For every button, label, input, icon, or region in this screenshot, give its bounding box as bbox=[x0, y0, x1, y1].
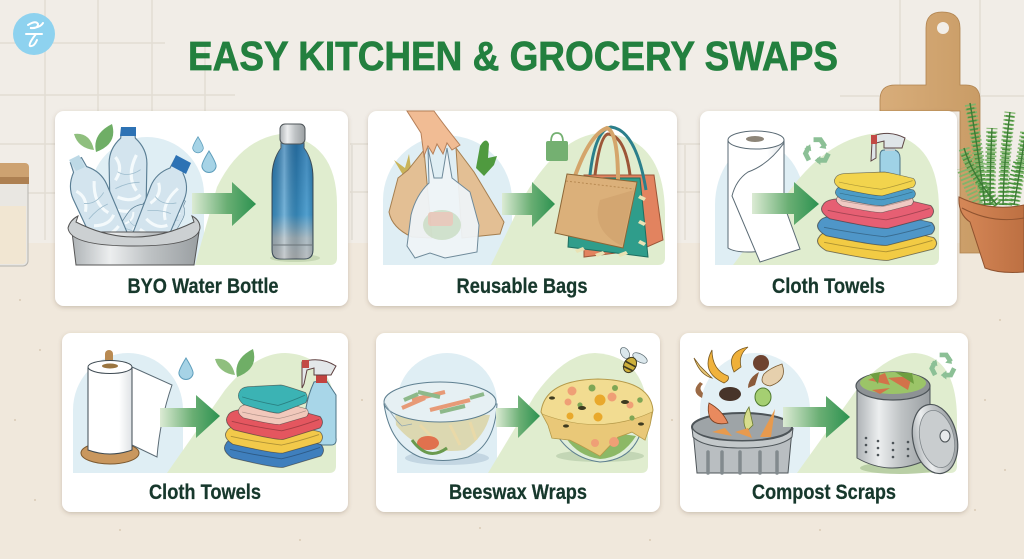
icon: leaves bbox=[74, 124, 113, 152]
icon: recycle bbox=[804, 140, 828, 165]
falling food scraps bbox=[694, 347, 784, 438]
background: tiled wall bbox=[0, 0, 1024, 250]
icon: green shopping bag bbox=[546, 133, 568, 161]
icon: water drop bbox=[179, 358, 193, 380]
background: speckled counter bbox=[0, 243, 1024, 559]
reusable tote bags bbox=[555, 127, 663, 257]
after backdrop bbox=[797, 353, 957, 473]
bucket bbox=[68, 216, 200, 265]
card: Cloth Towels (bottom) bbox=[62, 333, 348, 512]
icon: bee bbox=[619, 346, 649, 375]
compost can with lid bbox=[856, 372, 964, 478]
glass bowl with plastic wrap bbox=[384, 382, 497, 465]
arrow bbox=[783, 396, 850, 438]
hand bbox=[407, 111, 460, 156]
card: Beeswax Wraps bbox=[376, 333, 660, 512]
crumpled plastic bottles bbox=[59, 127, 197, 257]
arrow bbox=[502, 182, 555, 227]
label: Beeswax Wraps bbox=[449, 481, 587, 504]
icon: leaves bbox=[215, 349, 254, 377]
after backdrop bbox=[167, 353, 336, 473]
icon: recycle bbox=[931, 355, 954, 380]
potted rosemary bbox=[959, 103, 1024, 272]
before backdrop bbox=[383, 136, 512, 265]
paper towel roll bbox=[728, 131, 800, 262]
title: EASY KITCHEN & GROCERY SWAPS bbox=[188, 33, 838, 79]
label: Reusable Bags bbox=[456, 275, 588, 298]
bag contents bbox=[423, 210, 461, 240]
reusable steel bottle bbox=[270, 124, 320, 262]
spray bottle bbox=[302, 360, 336, 445]
metal trash bin bbox=[692, 413, 792, 473]
before backdrop bbox=[397, 353, 497, 473]
before backdrop bbox=[715, 144, 805, 265]
paper towel on holder bbox=[81, 350, 172, 464]
bin front rim bbox=[692, 428, 793, 448]
label: BYO Water Bottle bbox=[128, 275, 278, 298]
card: Reusable Bags bbox=[368, 111, 677, 306]
cutting board bbox=[880, 12, 980, 253]
stacked towels bbox=[818, 172, 937, 260]
after backdrop bbox=[733, 133, 939, 265]
label: Compost Scraps bbox=[752, 481, 896, 504]
before backdrop bbox=[90, 137, 204, 265]
glass storage jar bbox=[0, 163, 29, 266]
card: Cloth Towels (top) bbox=[700, 111, 957, 306]
before backdrop bbox=[700, 353, 810, 473]
spray bottle bbox=[871, 133, 905, 180]
logo badge bbox=[13, 13, 55, 55]
tan paper bags bbox=[389, 148, 504, 238]
after backdrop bbox=[491, 133, 665, 265]
stacked towels bbox=[224, 385, 323, 467]
plastic bag bbox=[407, 148, 479, 258]
beeswax-wrapped bowl bbox=[541, 379, 653, 462]
after backdrop bbox=[488, 353, 648, 473]
before backdrop bbox=[73, 353, 183, 473]
arrow bbox=[496, 395, 540, 438]
card: BYO Water Bottle bbox=[55, 111, 348, 306]
icon: water drops bbox=[193, 137, 216, 173]
vegetables bbox=[394, 140, 497, 180]
label: Cloth Towels bbox=[772, 275, 885, 298]
after backdrop bbox=[195, 134, 337, 265]
card: Compost Scraps bbox=[680, 333, 968, 512]
arrow bbox=[192, 182, 256, 226]
arrow bbox=[160, 395, 220, 438]
arrow bbox=[752, 182, 819, 225]
label: Cloth Towels bbox=[149, 481, 261, 504]
